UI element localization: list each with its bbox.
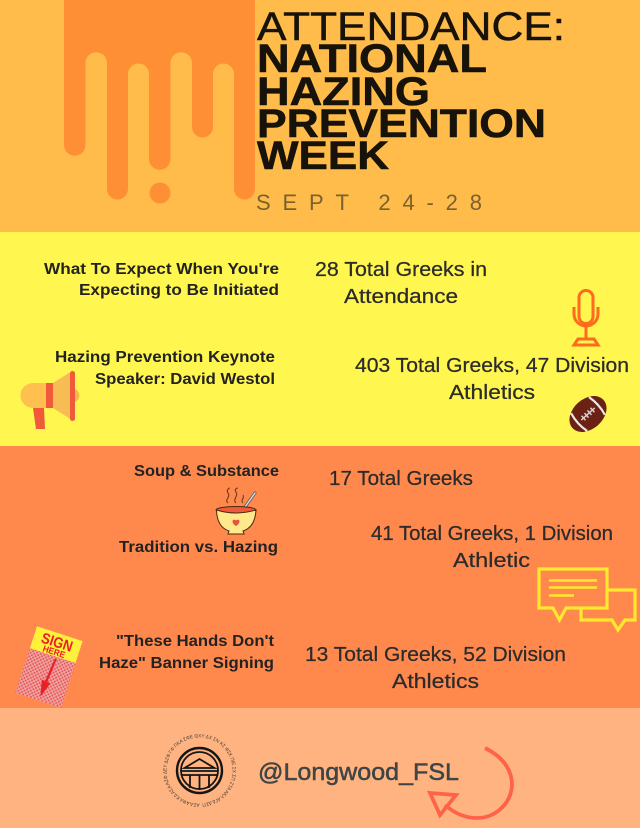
icon: microphone <box>574 290 598 345</box>
title: NATIONAL <box>257 37 487 81</box>
panel: yellow band <box>0 232 640 446</box>
text block: event 2 attendance <box>355 355 629 404</box>
date subtitle: SEPT 24-28 <box>256 190 482 215</box>
icon: megaphone <box>20 371 79 429</box>
icon: soup bowl <box>216 488 256 534</box>
text block: event 5 name: "These Hands Don't <box>116 633 274 650</box>
footer handle: @Longwood_FSL <box>258 759 459 786</box>
text block: event 1 attendance <box>315 259 487 308</box>
text block: event 2 name <box>55 349 275 388</box>
text block: event 5 name: Haze" Banner Signing <box>99 655 274 672</box>
icon: football <box>562 389 614 439</box>
text block: event 1 attendance: 28 Total Greeks in <box>315 259 487 281</box>
text block: event 2 name: Hazing Prevention Keynote <box>55 349 275 366</box>
text block: event 4 attendance: 41 Total Greeks, 1 Division <box>371 523 613 545</box>
text block: event 3 name: Soup & Substance <box>134 463 279 480</box>
text block: event 2 attendance: 403 Total Greeks, 47 Division <box>355 355 629 377</box>
text block: event 5 name <box>99 633 274 672</box>
logo: Longwood seal: ΑΣΑ ΑΦΑ ΚΔ ΑΣΑ ΑΖΦ ΔΕΥ ΔΖΦ ΓΦ ΠΚΑ ΣΦΕ ΘΧΥ ΔΧ ΣΝ ΚΣ ΦΣΚ ΠΙΕ ΣΧ ΣΠ ΖΤΑ ΑΚΛ ΑΓΔ ΔΣΠ <box>163 734 236 807</box>
text block: event 2 attendance: Athletics <box>449 382 535 404</box>
title <box>257 5 565 178</box>
title: ATTENDANCE: <box>257 5 565 49</box>
text block: event 5 attendance: 13 Total Greeks, 52 Division <box>305 644 566 666</box>
text block: event 1 name: Expecting to Be Initiated <box>79 282 279 299</box>
text block: event 5 attendance <box>305 644 566 693</box>
text block: event 4 attendance: Athletic <box>453 550 530 572</box>
text block: event 3 attendance: 17 Total Greeks <box>329 468 473 490</box>
arrow: curved <box>430 748 512 818</box>
icon: dripping paint <box>64 0 255 204</box>
text block: event 2 name: Speaker: David Westol <box>95 371 275 388</box>
text block: event 1 name <box>44 261 279 299</box>
title: WEEK <box>257 134 389 178</box>
icon: sign here poster: SIGN <box>39 630 75 656</box>
text block: event 5 attendance: Athletics <box>392 671 479 693</box>
panel: orange band <box>0 446 640 708</box>
title: HAZING <box>257 70 430 114</box>
text block: event 1 attendance: Attendance <box>344 286 458 308</box>
text block: event 1 name: What To Expect When You're <box>44 261 279 278</box>
panel: header background <box>0 0 640 232</box>
icon: sign here poster: HERE <box>41 643 66 660</box>
panel: footer band <box>0 708 640 828</box>
icon: sign here poster <box>15 626 83 708</box>
text block: event 4 attendance <box>371 523 613 572</box>
icon: speech bubbles <box>539 569 635 630</box>
title: PREVENTION <box>257 102 546 146</box>
text block: event 4 name: Tradition vs. Hazing <box>119 539 278 556</box>
